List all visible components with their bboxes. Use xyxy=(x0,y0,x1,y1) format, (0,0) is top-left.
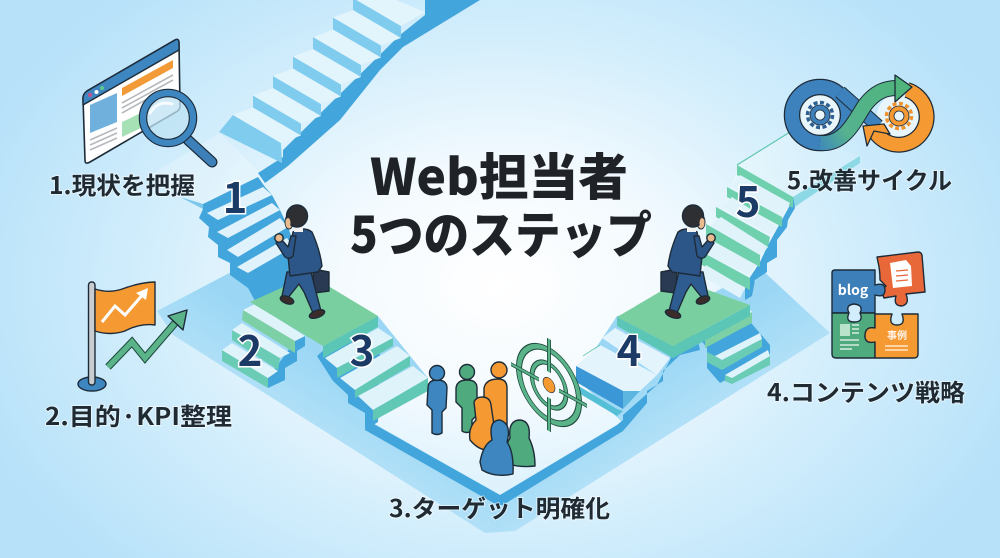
icon: improvement cycle loop xyxy=(792,75,927,146)
staircase: upper left flight xyxy=(219,0,480,183)
icon: puzzle pieces: 事例 xyxy=(887,327,907,342)
stair shadow plane: left xyxy=(157,270,500,533)
person climbing: left xyxy=(275,205,329,320)
title xyxy=(350,138,652,268)
step number 4: 4 xyxy=(617,318,641,379)
label: step 5: 5.改善サイクル xyxy=(787,161,952,196)
staircase: flight 1 xyxy=(180,177,300,301)
staircase: flight 3 xyxy=(317,328,428,430)
staircase: flight 5 xyxy=(700,132,860,300)
step number 2: 2 xyxy=(238,318,262,379)
staircase: flight 2 xyxy=(222,304,305,388)
green landing: right xyxy=(617,280,750,358)
staircase: lower right flight xyxy=(697,305,770,384)
icon: puzzle pieces: blog xyxy=(838,280,869,300)
title: 5つのステップ xyxy=(350,196,652,268)
icon: puzzle pieces xyxy=(832,252,925,358)
V-shaped floor edge xyxy=(365,420,623,505)
icon: target xyxy=(511,318,587,452)
pale light band behind step 1 xyxy=(150,133,262,205)
step number 5: 5 xyxy=(736,169,760,230)
icon: flag and growth arrow xyxy=(78,282,187,391)
label: step 4: 4.コンテンツ戦略 xyxy=(767,373,965,408)
label: step 1: 1.現状を把握 xyxy=(49,166,195,201)
staircase: flight 4 xyxy=(576,328,700,431)
title: Web担当者 xyxy=(370,138,628,210)
step number 1: 1 xyxy=(223,165,247,226)
step number 3: 3 xyxy=(350,318,374,379)
stair shadow plane: right xyxy=(500,268,830,532)
green landing: left xyxy=(250,275,378,358)
icon: target audience people xyxy=(427,362,535,475)
person climbing: right xyxy=(661,205,715,320)
icon: browser with magnifier xyxy=(83,39,212,163)
label: step 3: 3.ターゲット明確化 xyxy=(389,489,610,524)
label: step 2: 2.目的·KPI整理 xyxy=(45,397,232,432)
